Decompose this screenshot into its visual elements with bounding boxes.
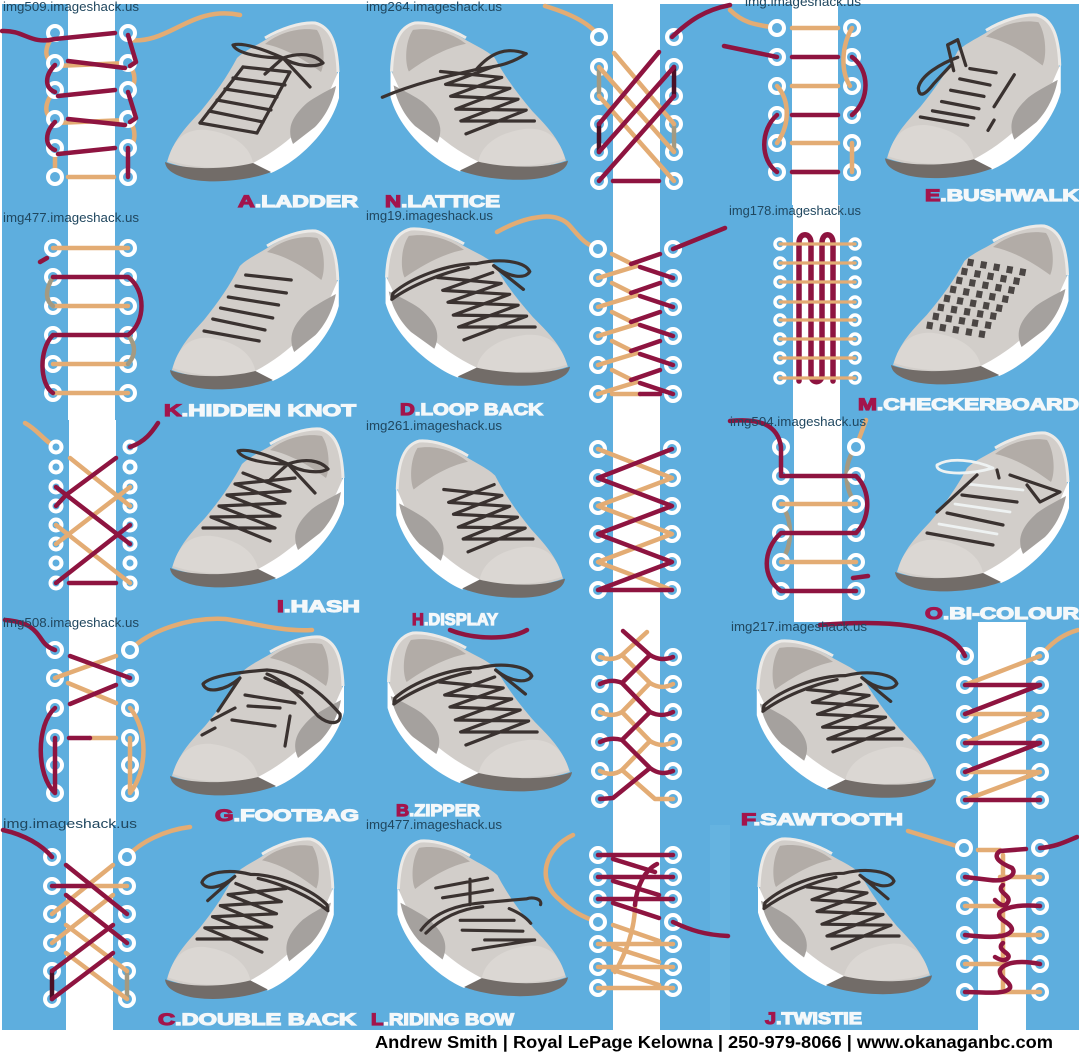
- panel: F sawtooth: [731, 619, 1078, 1030]
- label: N.LATTICE: [385, 192, 500, 211]
- label: K .HIDDEN KNOT: [164, 401, 357, 420]
- watermark: img19.imageshack.us: [366, 208, 493, 223]
- panel: I hash: [25, 420, 360, 617]
- label: O .BI-COLOUR: [925, 604, 1079, 623]
- shoe with twistie lacing: [758, 838, 932, 994]
- lacing diagram: display: [591, 442, 679, 597]
- panel: O bi-colour: [730, 414, 1079, 623]
- watermark: img261.imageshack.us: [366, 418, 503, 433]
- panel: J twistie: [758, 831, 1077, 1028]
- panel: M checkerboard: [729, 203, 1079, 420]
- panel: H display: [366, 418, 679, 629]
- panel: L riding bow: [366, 817, 728, 1029]
- panel: E bushwalk: [724, 0, 1079, 205]
- lacing diagram: loop back: [497, 217, 725, 401]
- lacing diagram: riding bow: [546, 835, 728, 995]
- label: C .DOUBLE BACK: [158, 1010, 357, 1029]
- label: M .CHECKERBOARD: [858, 395, 1079, 414]
- shoe with riding bow lacing: [397, 840, 568, 996]
- shoe with hash lacing: [170, 428, 344, 587]
- label: E.BUSHWALK: [925, 186, 1079, 205]
- label: H.DISPLAY: [412, 610, 499, 629]
- shoe with zipper lacing: [388, 632, 572, 791]
- label: F.SAWTOOTH: [741, 810, 903, 829]
- label: J.TWISTIE: [765, 1009, 862, 1028]
- shoe with ladder lacing: [165, 22, 339, 181]
- lacing diagram: ladder: [2, 13, 240, 184]
- shoe with double back lacing: [165, 838, 334, 999]
- shoe with bushwalk lacing: [885, 14, 1061, 178]
- shoe with hidden knot lacing: [170, 230, 339, 389]
- panel: K hidden knot: [3, 210, 357, 420]
- lacing diagram: lattice: [545, 5, 730, 188]
- panel: C double back: [3, 816, 357, 1030]
- shoe with loop back lacing: [386, 228, 570, 386]
- watermark: img477.imageshack.us: [366, 817, 503, 832]
- lacing diagram: hidden knot: [40, 241, 142, 400]
- lacing diagram: bushwalk: [724, 10, 866, 179]
- panel: A ladder: [2, 0, 358, 215]
- shoe with bi-colour lacing: [895, 432, 1069, 591]
- lacing diagram: double back: [3, 827, 190, 1006]
- panel: G footbag: [3, 615, 359, 825]
- panel: B zipper: [388, 630, 680, 820]
- shoe with footbag lacing: [170, 636, 344, 795]
- label: A .LADDER: [238, 192, 358, 211]
- watermark: img477.imageshack.us: [3, 210, 140, 225]
- watermark: img.imageshack.us: [3, 816, 138, 831]
- watermark: img178.imageshack.us: [729, 203, 861, 218]
- watermark: img508.imageshack.us: [3, 615, 140, 630]
- shoe with lattice lacing: [382, 22, 568, 180]
- lacing diagram: footbag: [5, 619, 312, 800]
- label: L.RIDING BOW: [371, 1010, 515, 1029]
- label: G .FOOTBAG: [215, 806, 359, 825]
- shoe with checkerboard lacing: [891, 225, 1068, 384]
- shoe with sawtooth lacing: [757, 640, 936, 798]
- lacing diagram: bi-colour: [730, 420, 868, 598]
- label: I.HASH: [277, 597, 360, 616]
- lacing diagram: hash: [25, 423, 158, 588]
- panel: D loop back: [366, 208, 725, 419]
- lacing diagram: checkerboard: [775, 235, 860, 383]
- watermark: img504.imageshack.us: [730, 414, 867, 429]
- footer contact line: Andrew Smith | Royal LePage Kelowna | 250-979-8066 | www.okanaganbc.com: [375, 1032, 1053, 1052]
- shoe with display lacing: [396, 440, 565, 598]
- label: D.LOOP BACK: [400, 400, 544, 419]
- lacing diagram: twistie: [908, 831, 1077, 999]
- label: B.ZIPPER: [396, 801, 480, 820]
- watermark: img217.imageshack.us: [731, 619, 868, 634]
- lacing diagram: zipper: [450, 630, 680, 806]
- lacing diagram: sawtooth: [820, 623, 1078, 807]
- panel: N lattice: [366, 0, 730, 1030]
